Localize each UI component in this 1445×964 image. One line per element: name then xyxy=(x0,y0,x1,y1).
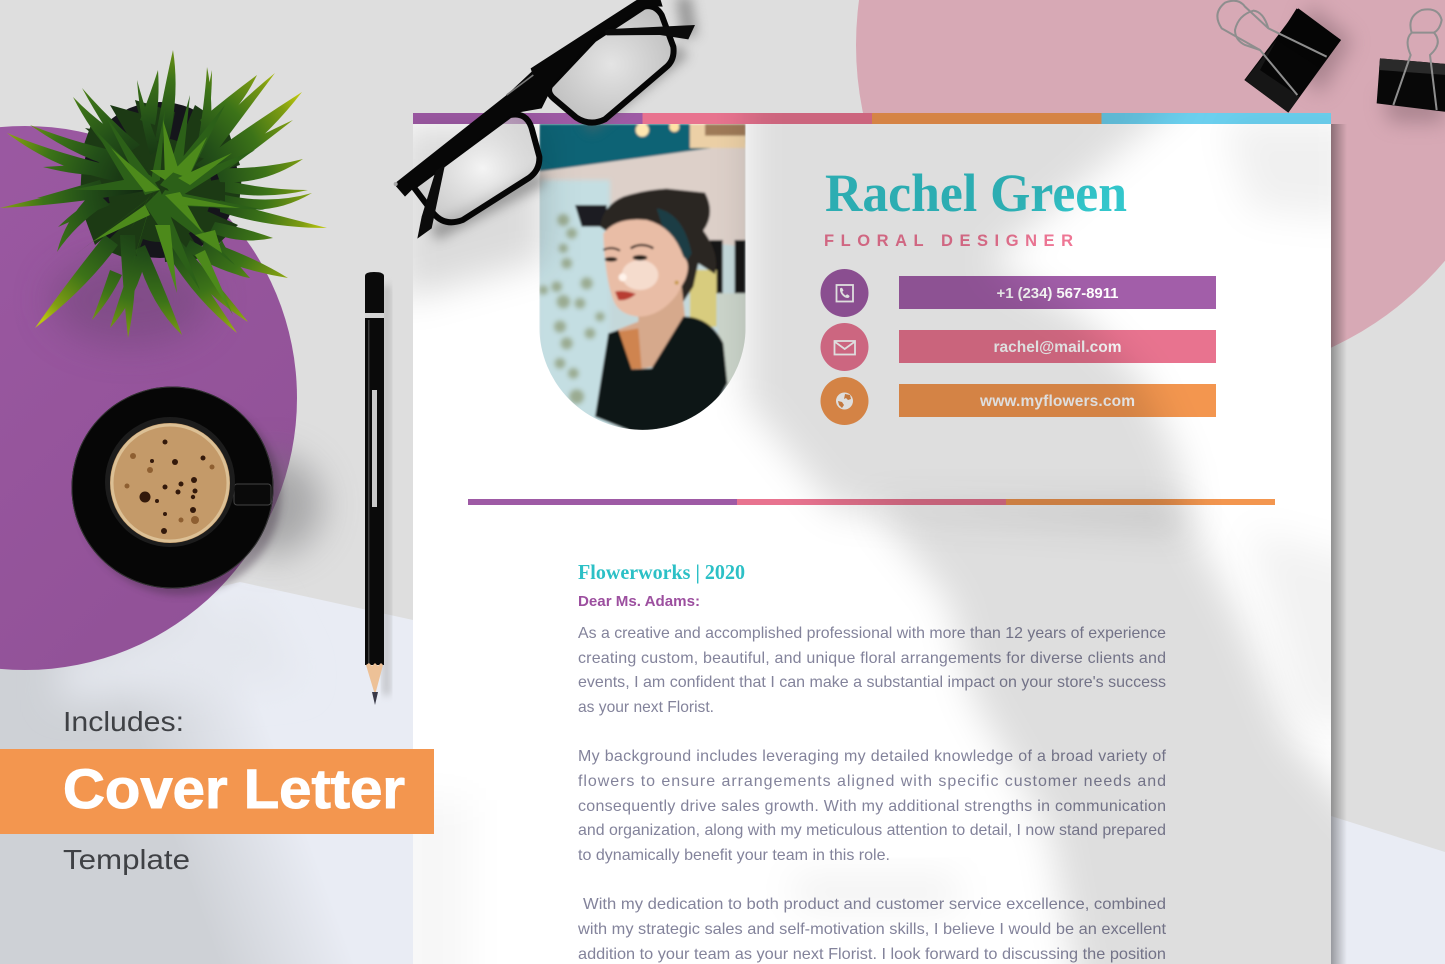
letter body: My background includes leveraging my detailed knowledge of a broad variety of xyxy=(578,748,1167,765)
crema spots xyxy=(140,440,206,534)
mid leaves xyxy=(70,95,265,290)
plant xyxy=(0,50,327,338)
cover letter page xyxy=(395,90,1370,964)
letter body xyxy=(577,625,1167,963)
icon: envelope xyxy=(820,323,868,371)
cup handle xyxy=(234,484,271,505)
far temple arms xyxy=(603,25,695,39)
left lens xyxy=(413,114,539,222)
right lens xyxy=(549,6,674,123)
purple circle backdrop xyxy=(0,126,297,670)
phone contact: +1 (234) 567-8911 xyxy=(996,285,1118,302)
portrait photo xyxy=(539,122,747,433)
face xyxy=(603,219,688,317)
orange banner xyxy=(0,749,434,834)
window light and shadow overlay xyxy=(395,90,1370,964)
binder clip left xyxy=(1217,1,1341,113)
website contact xyxy=(820,377,1216,425)
glasses shadow xyxy=(433,0,690,233)
letter body: as your next Florist. xyxy=(578,699,714,716)
binder clip right xyxy=(1377,9,1445,112)
letter body: addition to your team as your next Florist. I look forward to discussing the position xyxy=(578,946,1166,963)
letter heading: Flowerworks | 2020 xyxy=(578,560,745,584)
template label: Template xyxy=(63,844,190,875)
section divider xyxy=(468,499,1275,505)
website contact: www.myflowers.com xyxy=(979,393,1135,410)
letter body: to dynamically benefit your team in this role. xyxy=(578,847,890,864)
cup rim xyxy=(105,417,235,547)
letter body: As a creative and accomplished professional with more than 12 years of experience xyxy=(578,625,1166,642)
binder clip shadows xyxy=(1290,5,1445,122)
email contact xyxy=(820,323,1216,371)
top colour strip xyxy=(413,113,1331,124)
paper sheet xyxy=(413,124,1331,964)
clip wires xyxy=(1217,1,1327,95)
clip wires xyxy=(1393,9,1442,110)
letter body: with my strategic sales and self-motivation skills, I believe I would be an excellent xyxy=(577,921,1167,938)
icon: phone xyxy=(820,269,868,317)
phone contact xyxy=(820,269,1216,317)
letter body: With my dedication to both product and customer service excellence, combined xyxy=(583,896,1166,913)
paper side shadow xyxy=(1331,124,1347,964)
name: Rachel Green xyxy=(825,163,1127,223)
bright inner leaves xyxy=(92,120,240,315)
orange banner: Cover Letter xyxy=(63,757,405,820)
plant pot xyxy=(82,102,238,258)
letter body: and organization, along with my meticulous attention to detail, I now stand prepared xyxy=(578,822,1166,839)
pencil body xyxy=(365,272,384,665)
black top xyxy=(595,317,727,433)
coffee cup xyxy=(72,386,281,595)
icon: globe xyxy=(820,377,868,425)
pink circle backdrop xyxy=(856,0,1445,379)
coffee surface xyxy=(110,423,230,543)
salutation: Dear Ms. Adams: xyxy=(578,593,700,610)
cup shadow on background xyxy=(222,455,322,555)
includes label: Includes: xyxy=(63,706,184,737)
outer leaves xyxy=(0,50,327,338)
email contact: rachel@mail.com xyxy=(994,339,1122,356)
pencil tip xyxy=(366,663,383,695)
saucer xyxy=(72,386,274,588)
neck and chest xyxy=(617,287,685,369)
letter body: flowers to ensure arrangements aligned with specific customer needs and xyxy=(578,773,1166,790)
brow bar xyxy=(394,0,663,197)
letter body: creating custom, beautiful, and unique floral arrangements for diverse clients and xyxy=(578,650,1166,667)
letter body: events, I am confident that I can make a substantial impact on your store's success xyxy=(578,674,1166,691)
glasses xyxy=(394,0,695,239)
hair back xyxy=(600,189,716,302)
letter body: consequently drive sales growth. With my additional strengths in communication xyxy=(578,798,1166,815)
dense dark foliage xyxy=(80,100,242,262)
job title: FLORAL DESIGNER xyxy=(824,232,1073,250)
pencil xyxy=(365,272,390,705)
